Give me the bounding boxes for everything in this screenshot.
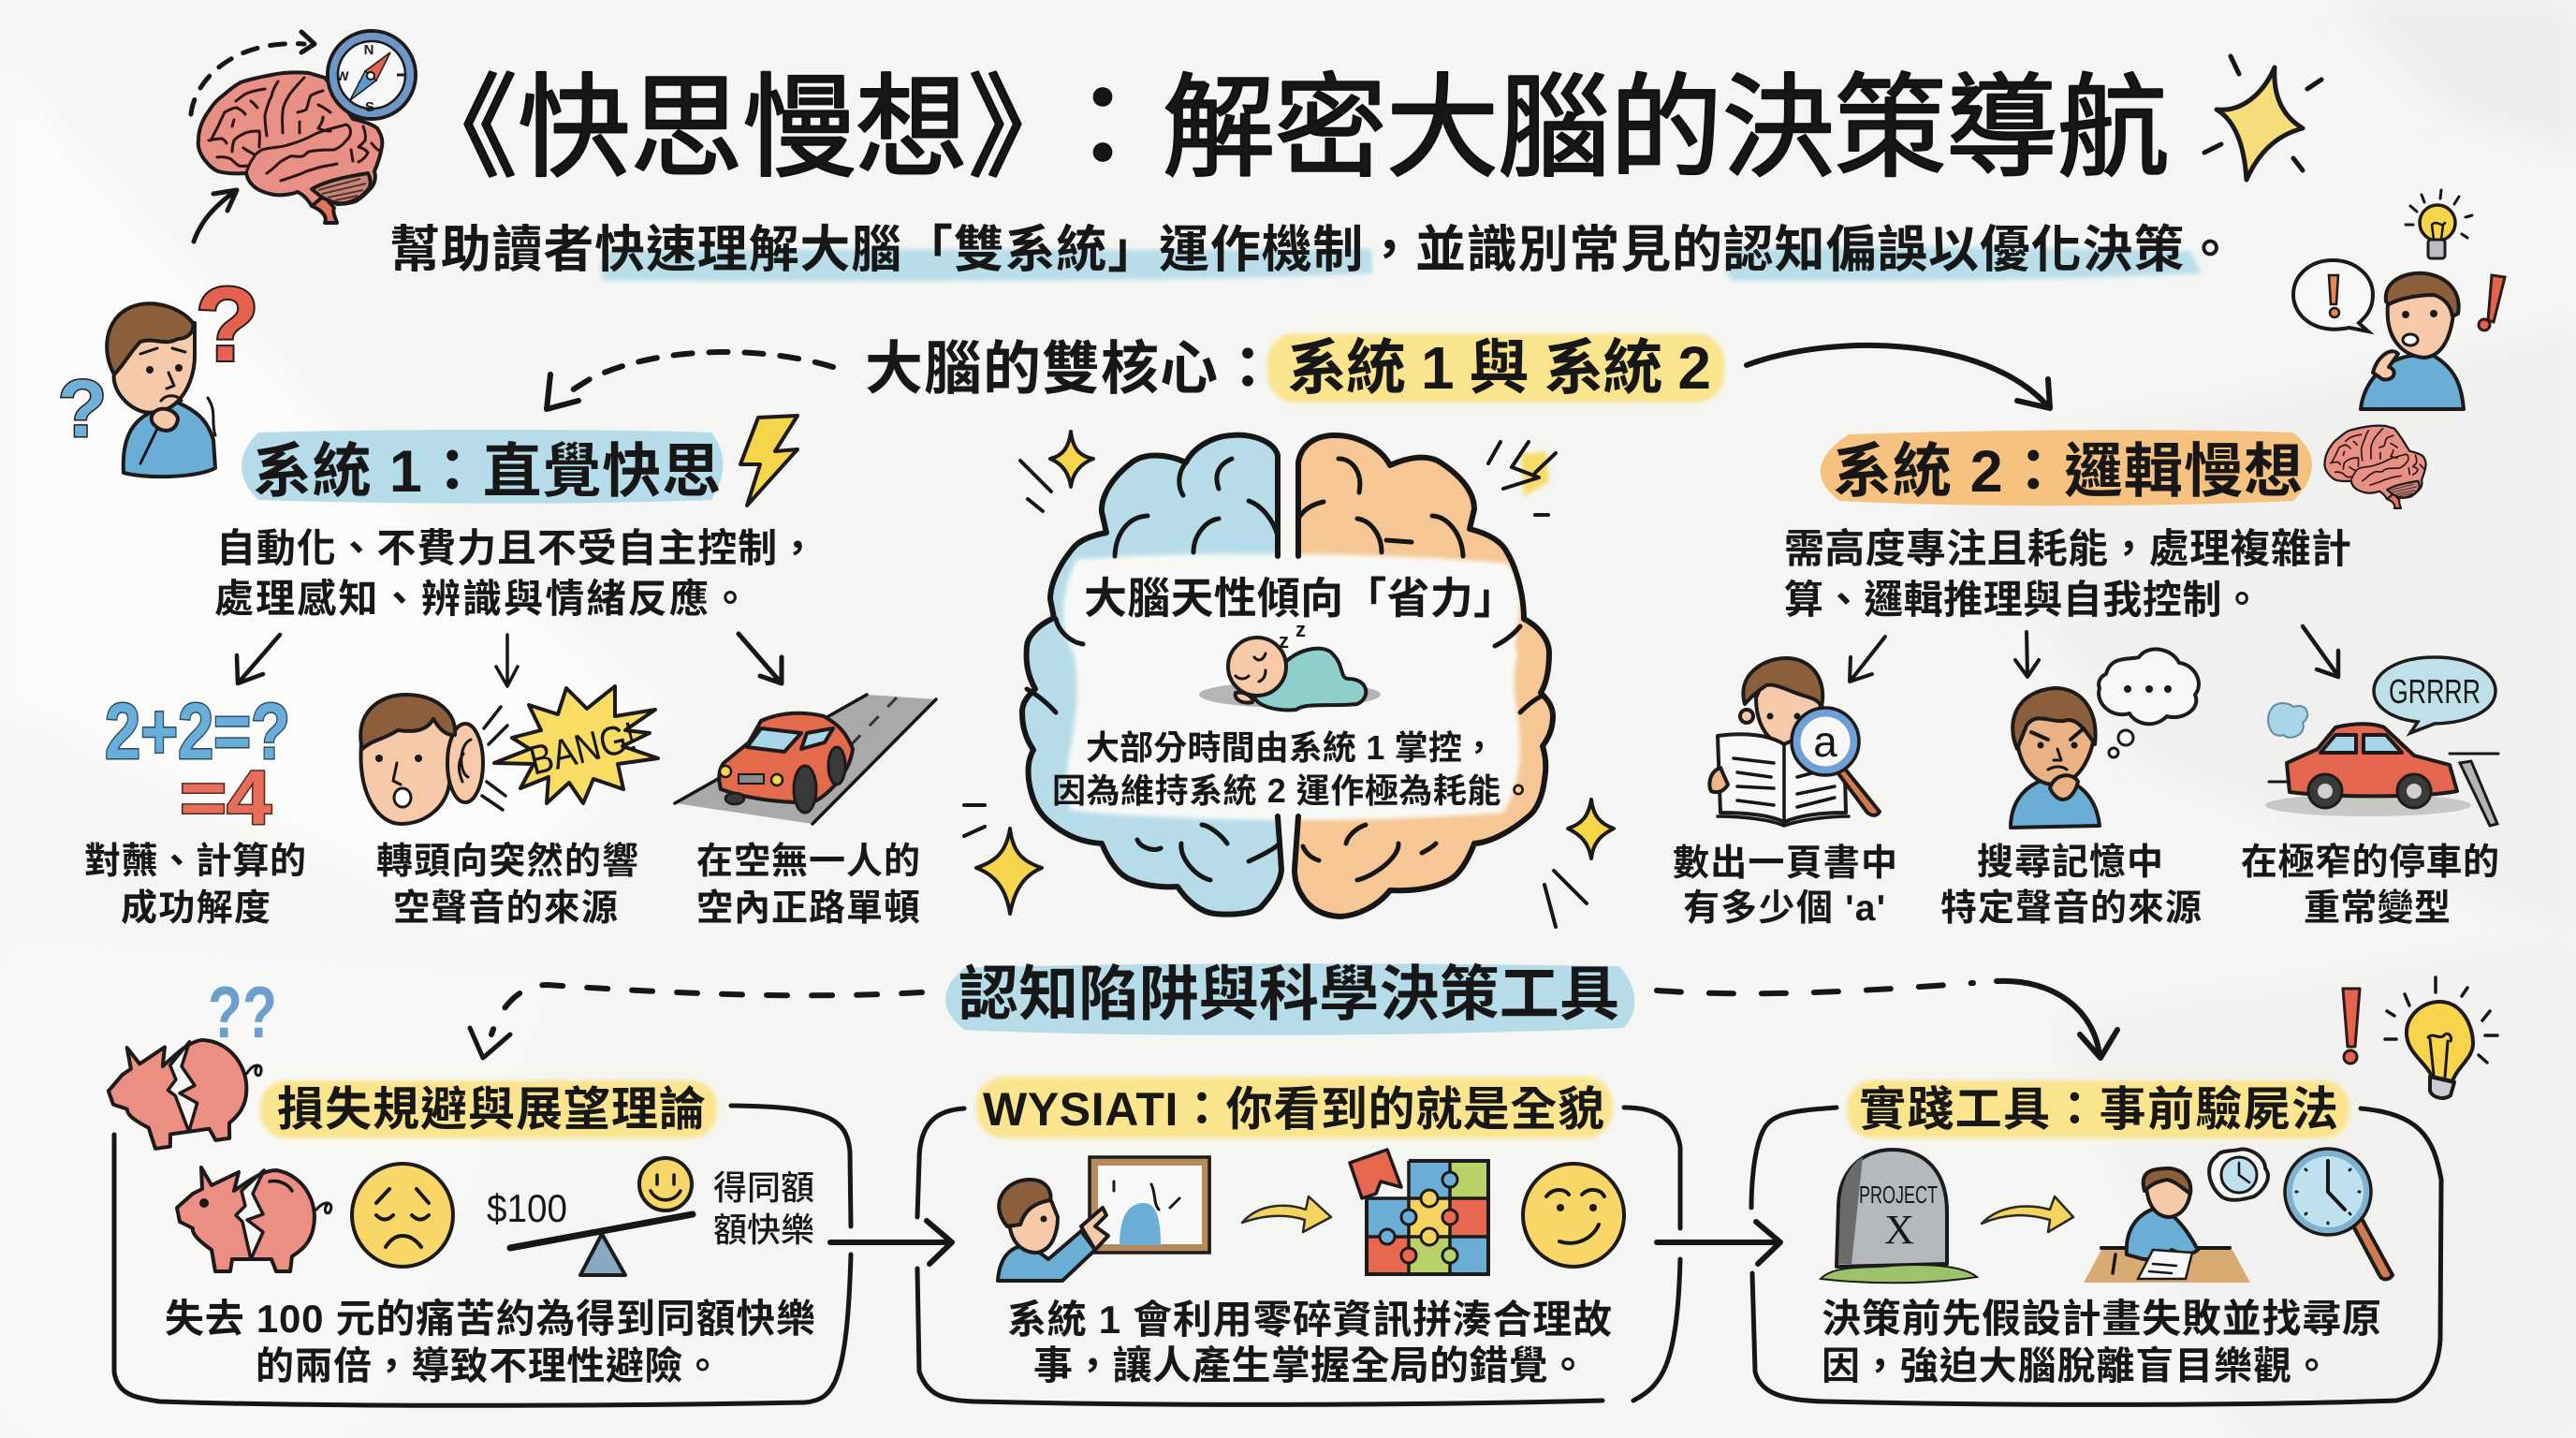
title [405, 66, 2170, 191]
icon: car parking with GRRRR [2265, 657, 2498, 826]
system 2 description [1784, 527, 2351, 622]
chart: seesaw [487, 1158, 814, 1275]
central description: 因為維持系統 2 運作極為耗能。 [1052, 771, 1535, 810]
icon: magnifier with clock [2285, 1149, 2393, 1279]
icon: blue question marks: ?? [208, 971, 277, 1053]
system 1 description: 自動化、不費力且不受自主控制， [216, 526, 817, 570]
arrow: dashed to loss aversion [470, 985, 922, 1058]
heading: dual core [865, 333, 1724, 403]
panel description: 因，強迫大腦脫離盲目樂觀。 [1822, 1344, 2331, 1387]
system 1 description [214, 526, 817, 621]
label: bang: 轉頭向突然的響 [376, 842, 638, 882]
question mark: red: ? [196, 266, 259, 383]
icon: small brain [2324, 426, 2426, 508]
panel description [1007, 1298, 1612, 1387]
decoration: sparkles around brain [964, 432, 1614, 927]
arrow: up to brain [194, 190, 237, 242]
panel description [1822, 1297, 2381, 1387]
chart: seesaw: 額快樂 [713, 1211, 814, 1249]
icon: math problem: 2+2=? [105, 687, 290, 775]
label: car: 在空無一人的 [696, 842, 920, 882]
panel description: 事，讓人產生掌握全局的錯覺。 [1033, 1343, 1588, 1387]
smoke [2268, 703, 2307, 738]
central description: 大部分時間由系統 1 掌控， [1086, 728, 1496, 767]
icon: sleeping baby: z [1279, 629, 1289, 653]
icon: brain with compass [191, 31, 416, 242]
subtitle with highlights [389, 222, 2235, 281]
icon: car parking with GRRRR: GRRRR [2389, 672, 2481, 711]
heading: loss aversion: 損失規避與展望理論 [277, 1083, 706, 1136]
arrow: dashes to practical tool [1657, 981, 2117, 1058]
icon: brain [198, 72, 382, 223]
icon: sleeping baby: z [1295, 618, 1306, 641]
highlight: blue 2 [1726, 247, 2202, 281]
arrow: solid to system 2 [1747, 345, 2050, 408]
icon: math problem: =4 [180, 756, 271, 841]
heading: system 2: 系統 2：邏輯慢想 [1833, 439, 2303, 505]
panel: WYSIATI [917, 1077, 1680, 1404]
panel description: 決策前先假設計畫失敗並找尋原 [1822, 1297, 2381, 1341]
highlight: blue [945, 963, 1634, 1035]
label: math: 成功解度 [121, 888, 271, 929]
panel frame [917, 1108, 1680, 1404]
icon: tombstone [1821, 1150, 1977, 1283]
label: parking: 重常變型 [2304, 888, 2451, 929]
panel: loss aversion [103, 971, 851, 1405]
icon: reading person with magnifier [1709, 658, 1880, 826]
label: math: 對蘸、計算的 [84, 842, 306, 882]
panel: system 2 [1673, 426, 2499, 929]
icon: broken piggy [177, 1167, 331, 1271]
icon: lightbulb small [2406, 190, 2472, 258]
panel description: 失去 100 元的痛苦約為得到同額快樂 [165, 1297, 815, 1341]
brain left fill [1022, 435, 1281, 915]
icon: puzzle [1350, 1150, 1488, 1274]
label: search memory [1940, 843, 2202, 929]
heading: system 1: 系統 1：直覺快思 [253, 439, 721, 505]
panel description: 系統 1 會利用零碎資訊拼湊合理故 [1007, 1298, 1612, 1342]
icon: sad face [352, 1164, 453, 1267]
label: parking: 在極窄的停車的 [2241, 843, 2499, 883]
icon: compass [328, 31, 416, 119]
icon: sleeping baby [1199, 618, 1381, 710]
label: bang: 空聲音的來源 [393, 888, 618, 929]
person: surprised with lightbulb [2293, 190, 2505, 409]
icon: lightbulb large [2385, 977, 2497, 1098]
system 2 description: 需高度專注且耗能，處理複雜計 [1784, 527, 2351, 572]
label: car [696, 842, 920, 929]
speech bubble: exclamation [2293, 260, 2373, 331]
central title: 大腦天性傾向「省力」 [1084, 574, 1516, 623]
title: ： [1046, 66, 1159, 191]
icon: lightning [740, 416, 798, 506]
icon: thinking person with cloud [2011, 649, 2199, 828]
heading: WYSIATI: WYSIATI：你看到的就是全貌 [983, 1083, 1604, 1136]
icon: compass: W [336, 68, 349, 83]
heading: cognitive traps: 認知陷阱與科學決策工具 [959, 961, 1619, 1028]
person: confused with question marks [58, 266, 259, 477]
panel: practical tool [1751, 977, 2497, 1404]
speech bubble: GRRRR [2374, 657, 2496, 733]
central description [1052, 728, 1535, 810]
icon: person pointing at frame [998, 1157, 1209, 1281]
icon: math problem [105, 687, 290, 841]
title: 《快思慢想》 [405, 66, 1080, 191]
icon: car on road [675, 695, 936, 824]
arrow: panel 1 to panel 2 [830, 1221, 952, 1264]
highlight: blue 1 [600, 249, 1372, 281]
heading: dual core: 大腦的雙核心： [865, 337, 1277, 402]
label: search memory: 搜尋記憶中 [1977, 843, 2163, 883]
icon: reading person with magnifier: a [1813, 717, 1837, 766]
icon: broken piggy small [103, 1030, 271, 1154]
label: parking [2241, 843, 2499, 929]
panel frame [1751, 1108, 2441, 1404]
icon: tombstone: X [1884, 1207, 1914, 1253]
icon: exclamation [2343, 989, 2360, 1064]
arrow: dashed to system 1 [547, 352, 833, 409]
brain right fill [1295, 435, 1553, 917]
heading: practical tool: 實踐工具：事前驗屍法 [1859, 1083, 2338, 1136]
icon: person at desk [2084, 1149, 2268, 1283]
thought cloud with clock [2209, 1149, 2268, 1200]
system 1 description: 處理感知、辨識與情緒反應。 [214, 577, 750, 621]
chart: seesaw: 得同額 [713, 1168, 814, 1207]
label: count a: 數出一頁書中 [1673, 844, 1897, 884]
brain centre label area [1063, 554, 1520, 820]
subtitle text: 幫助讀者快速理解大腦「雙系統」運作機制，並識別常見的認知偏誤以優化決策。 [389, 222, 2235, 278]
title: 解密大腦的決策導航 [1163, 66, 2170, 191]
arrow: dashed arc to compass [191, 32, 315, 114]
icon: compass: N [364, 42, 373, 58]
label: count a: 有多少個 'a' [1683, 888, 1885, 929]
label: car: 空內正路單頓 [696, 888, 920, 929]
chart: seesaw: $100 [487, 1186, 567, 1230]
arrow: panel 2 to panel 3 [1657, 1222, 1780, 1264]
brain outline and folds [1022, 435, 1553, 917]
question mark: blue: ? [58, 364, 107, 454]
panel: system 1 [84, 416, 936, 929]
panel description [165, 1297, 815, 1387]
icon: head hearing bang [360, 686, 658, 824]
starburst [494, 686, 658, 803]
arrow: yellow curved [1982, 1196, 2073, 1232]
label: search memory: 特定聲音的來源 [1940, 888, 2202, 929]
arrow: yellow curved [1242, 1196, 1331, 1232]
panel description: 的兩倍，導致不理性避險。 [256, 1344, 722, 1387]
exclamation: red [2479, 275, 2505, 330]
icon: tombstone: PROJECT [1859, 1181, 1938, 1209]
panel: central brain [964, 432, 1614, 927]
icon: smirking face [1523, 1164, 1624, 1267]
arrows from description [1850, 626, 2338, 682]
system 2 description: 算、邏輯推理與自我控制。 [1784, 578, 2261, 622]
panel frame [114, 1106, 851, 1405]
label: math [84, 842, 306, 929]
icon: title sparkle [2204, 56, 2321, 180]
icon: head hearing bang: BANG! [525, 713, 641, 785]
heading: dual core: 系統 1 與 系統 2 [1287, 334, 1711, 402]
label: bang [376, 842, 638, 929]
icon: compass: S [365, 99, 374, 115]
label: count a [1673, 844, 1897, 929]
arrows from description [237, 634, 782, 686]
highlight: yellow [1267, 333, 1724, 403]
